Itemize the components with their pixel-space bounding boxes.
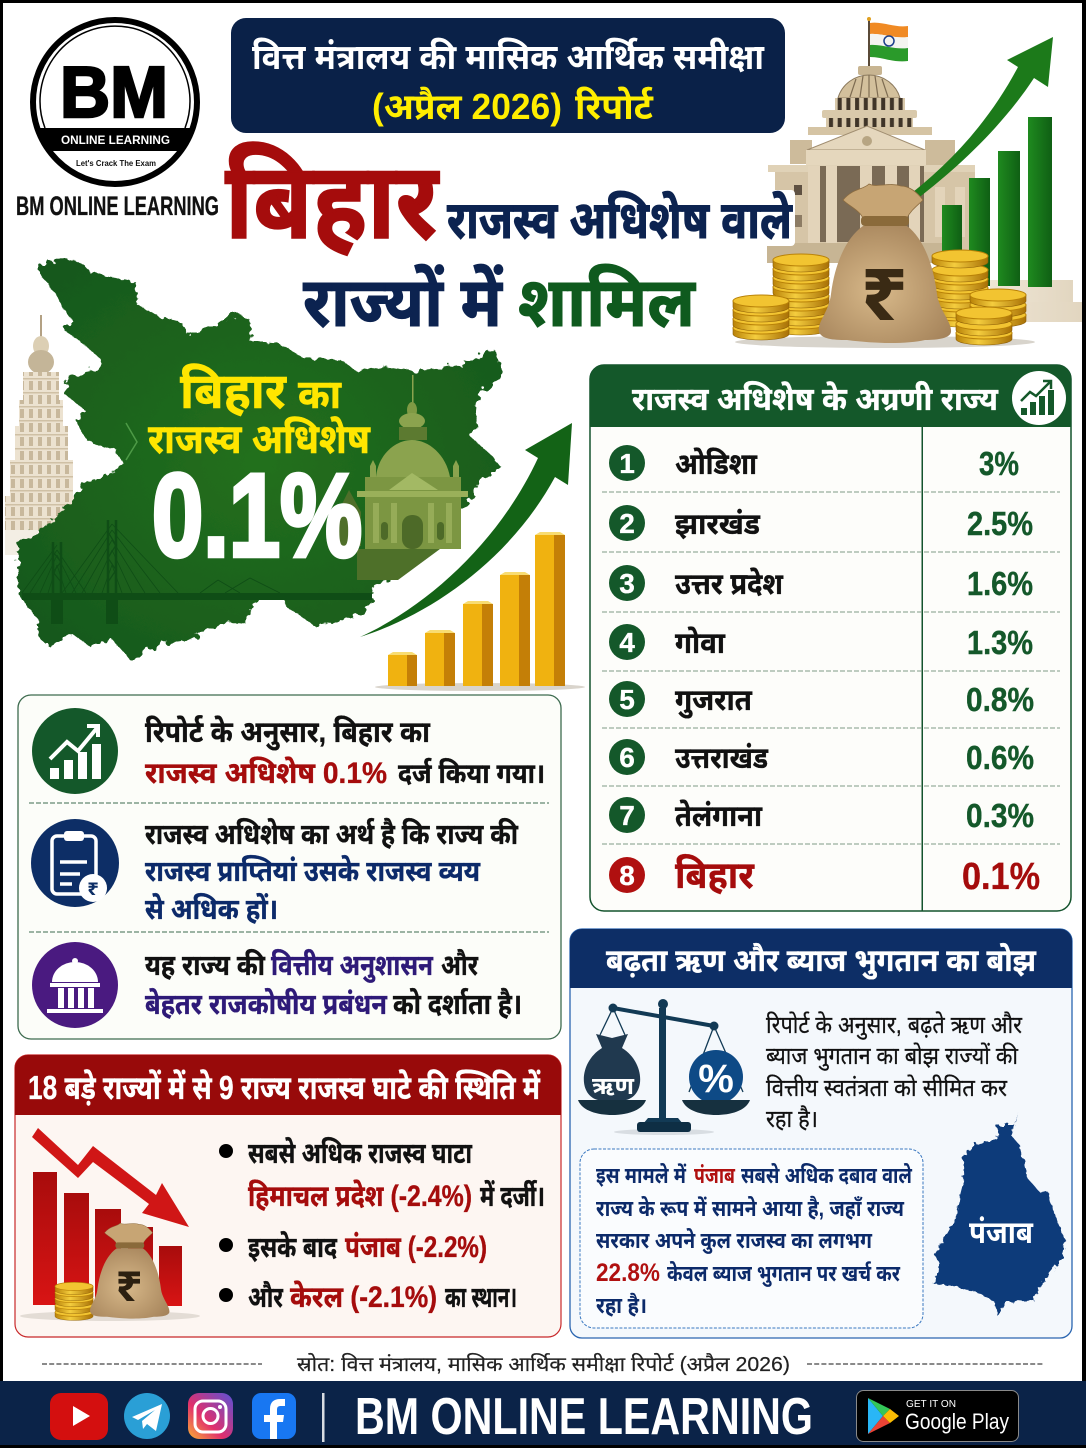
finding 3 text: वित्तीय अनुशासन (271, 949, 434, 983)
callout: Punjab interest burden: सबसे अधिक दबाव वाले (741, 1163, 913, 1188)
row 1: ओडिशा (675, 447, 758, 481)
debt description: वित्तीय स्वतंत्रता को सीमित कर (766, 1074, 1008, 1102)
row 5: गुजरात (675, 684, 753, 719)
row 6: 6 (619, 742, 635, 773)
headline: Bihar among revenue surplus states: शामिल (518, 264, 696, 341)
row 2 (609, 505, 1033, 542)
logo caption: BM ONLINE LEARNING (16, 191, 219, 221)
bridge silhouette (22, 520, 372, 624)
row 5 (609, 681, 1034, 719)
panel: leading revenue surplus states table (590, 365, 1071, 911)
callout: Punjab interest burden: राज्य के रूप में सामने आया है, जहाँ राज्य (596, 1195, 905, 1221)
finding 1 text (145, 714, 545, 790)
map: Punjab (933, 1113, 1066, 1317)
table header: राजस्व अधिशेष के अग्रणी राज्य (632, 381, 999, 417)
title box: monthly review report: (अप्रैल 2026) (372, 85, 562, 127)
Bihar map with revenue surplus figure (17, 258, 502, 662)
callout: Punjab interest burden: केवल ब्याज भुगतान पर खर्च कर (667, 1261, 901, 1287)
source line: स्रोत: वित्त मंत्रालय, मासिक आर्थिक समीक्षा रिपोर्ट (अप्रैल 2026) (297, 1351, 790, 1376)
bullet list: सबसे अधिक राजस्व घाटा (248, 1136, 472, 1170)
debt header (570, 929, 1072, 988)
footer brand name: BM ONLINE LEARNING (355, 1388, 813, 1446)
bullet list: में दर्जी। (480, 1180, 545, 1213)
finding 3 text: को दर्शाता है। (393, 988, 522, 1021)
callout: Punjab interest burden: इस मामले में (596, 1163, 687, 1188)
illustration: balance scale with loan bag and percent (578, 999, 750, 1135)
icon: bank (32, 942, 118, 1028)
bullet list: पंजाब (-2.2%) (345, 1231, 487, 1264)
bullet list (219, 1136, 545, 1314)
finding 1 text: रिपोर्ट के अनुसार, बिहार का (145, 714, 431, 751)
badge: Google Play (856, 1390, 1018, 1442)
row 2: झारखंड (675, 508, 761, 541)
callout: Punjab interest burden: सरकार अपने कुल राजस्व का लगभग (596, 1228, 872, 1254)
surplus label: का (298, 373, 342, 417)
row 3: उत्तर प्रदेश (675, 566, 784, 601)
callout: Punjab interest burden: रहा है। (596, 1292, 647, 1318)
debt description (766, 1011, 1023, 1133)
bullet list: का स्थान। (445, 1282, 517, 1314)
row 8: Bihar highlighted: 8 (619, 860, 635, 891)
row 7: 0.3% (966, 797, 1034, 834)
row 2: 2 (619, 508, 635, 539)
row 7: तेलंगाना (675, 798, 763, 833)
surplus value: 0.1% (152, 450, 362, 582)
badge: Google Play: Google Play (905, 1409, 1009, 1434)
finding 3 text: बेहतर राजकोषीय प्रबंधन (145, 987, 388, 1021)
badge: Google Play: GET IT ON (906, 1399, 956, 1410)
panel: rising debt and interest burden (570, 929, 1072, 1338)
debt description: ब्याज भुगतान का बोझ राज्यों की (766, 1042, 1019, 1071)
row 5: 5 (619, 684, 635, 715)
row 1: 3% (979, 445, 1019, 482)
row 8: Bihar highlighted: 0.1% (962, 856, 1040, 898)
title box: monthly review report: वित्त मंत्रालय की मासिक आर्थिक समीक्षा (252, 37, 765, 77)
title box: monthly review report: रिपोर्ट (575, 86, 654, 127)
growth arrow and gold bars (360, 423, 585, 691)
row 4: 1.3% (967, 624, 1033, 661)
row 8: Bihar highlighted (609, 853, 1040, 898)
icon: growth chart (32, 708, 118, 794)
row 1 (609, 445, 1019, 482)
illustration: parliament building, money bag, coins and green growth chart (733, 17, 1082, 348)
row 3: 3 (619, 568, 635, 599)
debt description: रिपोर्ट के अनुसार, बढ़ते ऋण और (766, 1011, 1023, 1040)
row 7 (609, 797, 1034, 834)
row 3 (609, 565, 1033, 602)
row 4 (609, 624, 1033, 661)
headline: Bihar among revenue surplus states (225, 141, 795, 341)
row 3: 1.6% (967, 565, 1033, 602)
callout: Punjab interest burden: 22.8% (596, 1259, 660, 1287)
row 6: 0.6% (966, 739, 1034, 776)
row 6 (609, 739, 1034, 776)
illustration: falling chart with money bag: ₹ (116, 1258, 142, 1311)
row 5: 0.8% (966, 681, 1034, 718)
finding 2 text: राजस्व प्राप्तियां उसके राजस्व व्यय (145, 854, 481, 888)
finding 2 text (145, 817, 518, 926)
illustration: balance scale with loan bag and percent: % (698, 1057, 734, 1101)
icon: Instagram (188, 1393, 233, 1439)
title box: monthly review report (231, 18, 785, 133)
logo: BM Online Learning (33, 20, 197, 184)
icon: Telegram (124, 1393, 170, 1439)
logo: BM Online Learning: Let's Crack The Exam (76, 159, 156, 168)
finding 2 text: से अधिक हों। (145, 892, 278, 926)
map shape (17, 258, 502, 662)
bullet list: और (248, 1281, 284, 1314)
map: Punjab: पंजाब (969, 1215, 1034, 1250)
callout: Punjab interest burden: पंजाब (694, 1163, 735, 1188)
finding 3 text (145, 949, 522, 1021)
icon: clipboard with rupee (31, 819, 119, 907)
illustration: parliament building, money bag, coins and green growth chart: ₹ (861, 247, 907, 338)
headline: Bihar among revenue surplus states: राज्यों में (303, 264, 503, 341)
finding 1 text: राजस्व अधिशेष 0.1% (145, 755, 387, 790)
icon: clipboard with rupee: ₹ (87, 878, 99, 900)
panel: revenue deficit states (15, 1055, 561, 1337)
icon: chart badge (1012, 371, 1066, 425)
bullet list: हिमाचल प्रदेश (-2.4%) (248, 1178, 472, 1213)
bullet list: केरल (-2.1%) (290, 1279, 437, 1314)
finding 2 text: राजस्व अधिशेष का अर्थ है कि राज्य की (145, 817, 518, 851)
deficit header (15, 1055, 561, 1115)
surplus label: बिहार (180, 363, 287, 419)
row 4: गोवा (675, 626, 726, 660)
icon: Facebook (252, 1393, 296, 1439)
illustration: falling chart with money bag (20, 1128, 200, 1321)
panel: report findings (18, 695, 561, 1039)
illustration: temple tower (5, 315, 79, 555)
row 8: Bihar highlighted: बिहार (675, 853, 755, 897)
debt description: रहा है। (766, 1105, 818, 1133)
row 1: 1 (619, 448, 635, 479)
bullet list: इसके बाद (248, 1230, 338, 1264)
footer bar (0, 1381, 1086, 1448)
deficit header: 18 बड़े राज्यों में से 9 राज्य राजस्व घाटे की स्थिति में (28, 1068, 541, 1106)
state building (338, 375, 468, 580)
callout: Punjab interest burden (580, 1149, 923, 1328)
debt header: बढ़ता ऋण और ब्याज भुगतान का बोझ (606, 943, 1037, 980)
row 2: 2.5% (967, 505, 1033, 542)
row 4: 4 (619, 627, 635, 658)
headline: Bihar among revenue surplus states: राजस्व अधिशेष वाले (447, 191, 793, 250)
finding 3 text: और (441, 949, 479, 982)
row 7: 7 (619, 800, 635, 831)
row 6: उत्तराखंड (675, 742, 769, 775)
headline: Bihar among revenue surplus states: बिहार (225, 141, 440, 261)
logo: BM Online Learning: ONLINE LEARNING (61, 135, 170, 147)
surplus label (148, 363, 371, 462)
finding 3 text: यह राज्य की (145, 949, 265, 982)
table header (590, 365, 1071, 427)
logo: BM Online Learning: BM (60, 53, 168, 133)
icon: YouTube (50, 1393, 108, 1440)
illustration: balance scale with loan bag and percent: ऋण (592, 1073, 635, 1100)
finding 1 text: दर्ज किया गया। (398, 757, 545, 789)
surplus label: राजस्व अधिशेष (148, 415, 371, 462)
